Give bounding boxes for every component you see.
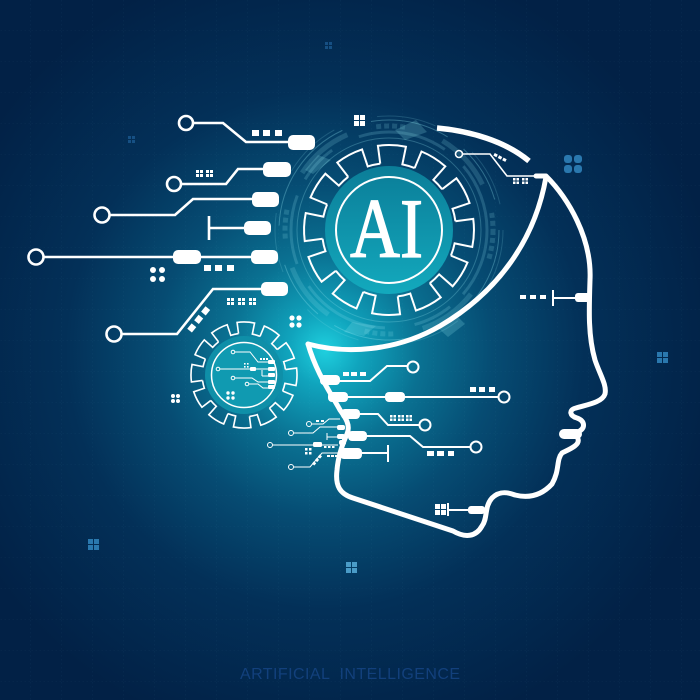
face circuit traces — [320, 362, 510, 516]
inner ring — [336, 177, 442, 283]
trace e — [340, 445, 388, 462]
small circuit gear — [189, 320, 299, 430]
AI label: AI — [350, 182, 423, 276]
gear teeth outline — [301, 142, 477, 318]
trace 4 — [209, 216, 271, 240]
trace c — [341, 409, 430, 430]
caption: ARTIFICIAL INTELLIGENCE — [240, 666, 460, 683]
technology rings around large gear — [275, 116, 503, 344]
chin trace — [448, 503, 485, 516]
back of head curve — [308, 177, 546, 350]
trace 5 — [28, 250, 278, 264]
trace d — [348, 431, 482, 452]
gear disc — [325, 166, 453, 294]
mini circuit traces — [216, 350, 270, 388]
neck micro circuits — [268, 419, 346, 470]
left circuit traces — [28, 116, 315, 342]
trace a — [320, 362, 418, 385]
lips — [564, 429, 577, 439]
trace 1 — [179, 116, 315, 150]
head outline — [308, 128, 605, 535]
trace 3 — [94, 192, 279, 222]
temple circuit — [456, 150, 590, 306]
face profile — [308, 176, 605, 535]
trace 2 — [167, 162, 291, 191]
trace b — [328, 392, 510, 402]
crown arc — [437, 128, 529, 161]
trace 6 — [106, 282, 288, 342]
large AI gear — [301, 142, 477, 318]
left chip dots — [150, 115, 365, 403]
face chip dots — [343, 372, 495, 515]
decorative square clusters — [88, 42, 668, 573]
